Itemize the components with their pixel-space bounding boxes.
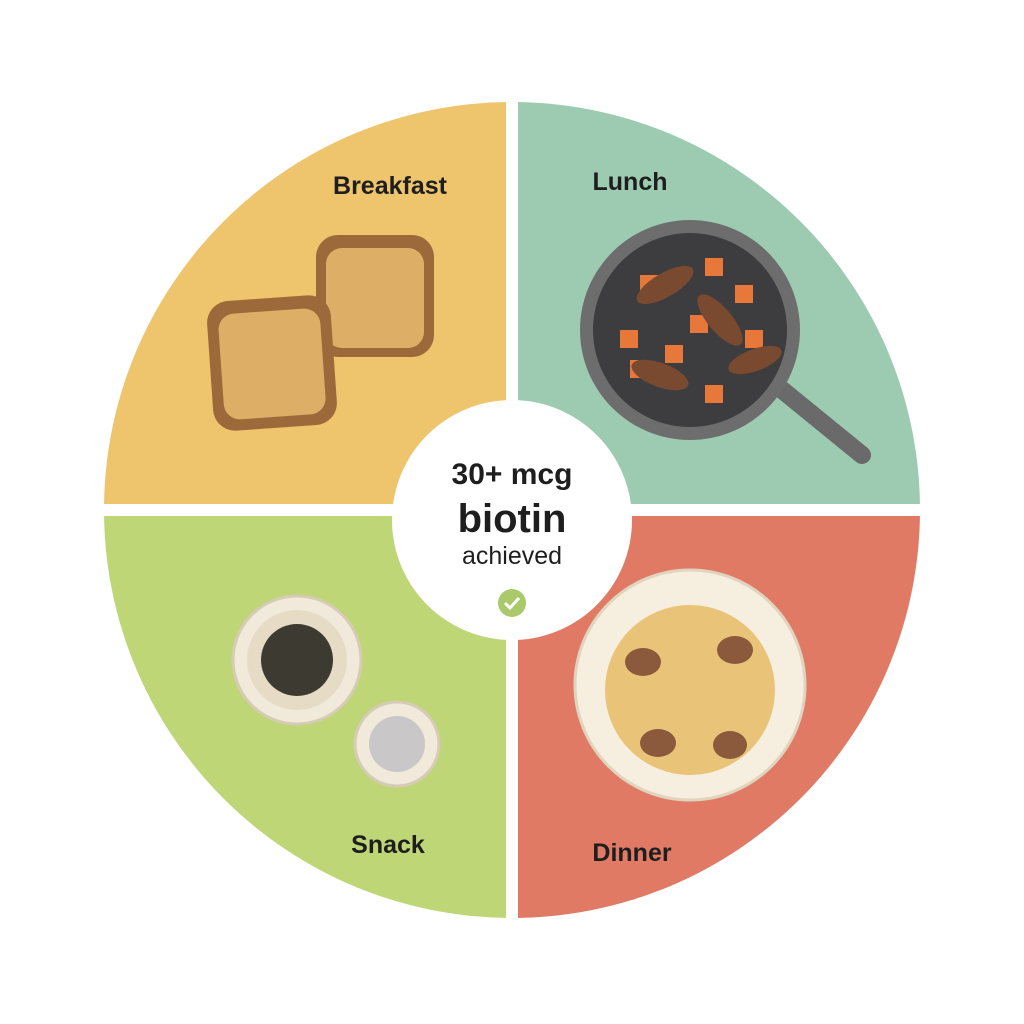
icon: check (498, 589, 526, 617)
center badge: achieved (462, 542, 562, 570)
center badge (392, 400, 632, 640)
icon: toast (206, 235, 434, 432)
icon: pan stir fry (580, 220, 862, 455)
center badge: 30+ mcg (452, 458, 572, 491)
heading: snack: Snack (351, 831, 425, 859)
panel: snack (100, 516, 506, 926)
icon: pasta plate (575, 570, 805, 800)
heading: lunch: Lunch (592, 168, 668, 196)
panel: dinner (518, 516, 928, 926)
center badge: biotin (458, 497, 566, 541)
panel: breakfast (100, 100, 506, 504)
heading: breakfast: Breakfast (333, 172, 448, 200)
icon: seed bowls (233, 596, 439, 786)
heading: dinner: Dinner (592, 839, 672, 867)
panel: lunch (518, 100, 928, 504)
